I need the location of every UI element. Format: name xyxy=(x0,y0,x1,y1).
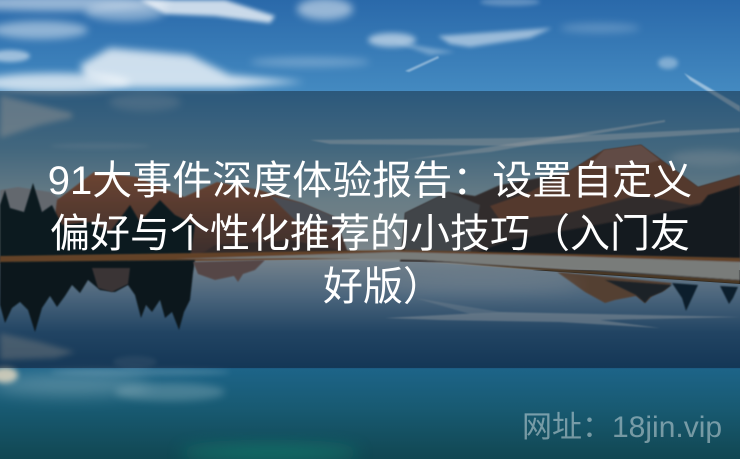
title xyxy=(48,159,692,309)
sky xyxy=(0,0,740,270)
mountains xyxy=(0,145,740,262)
tree lines xyxy=(0,183,740,262)
water highlights xyxy=(0,276,740,401)
clouds xyxy=(0,0,740,166)
darkened title band xyxy=(0,91,740,368)
far shore xyxy=(0,250,740,284)
title: 偏好与个性化推荐的小技巧（入门友 xyxy=(50,212,690,256)
lake reflections xyxy=(0,260,738,332)
website watermark: 网址：18jin.vip xyxy=(522,411,722,444)
lake xyxy=(0,260,740,459)
title: 好版） xyxy=(323,265,443,309)
green shallows xyxy=(180,445,360,459)
title: 91大事件深度体验报告：设置自定义 xyxy=(48,159,692,203)
